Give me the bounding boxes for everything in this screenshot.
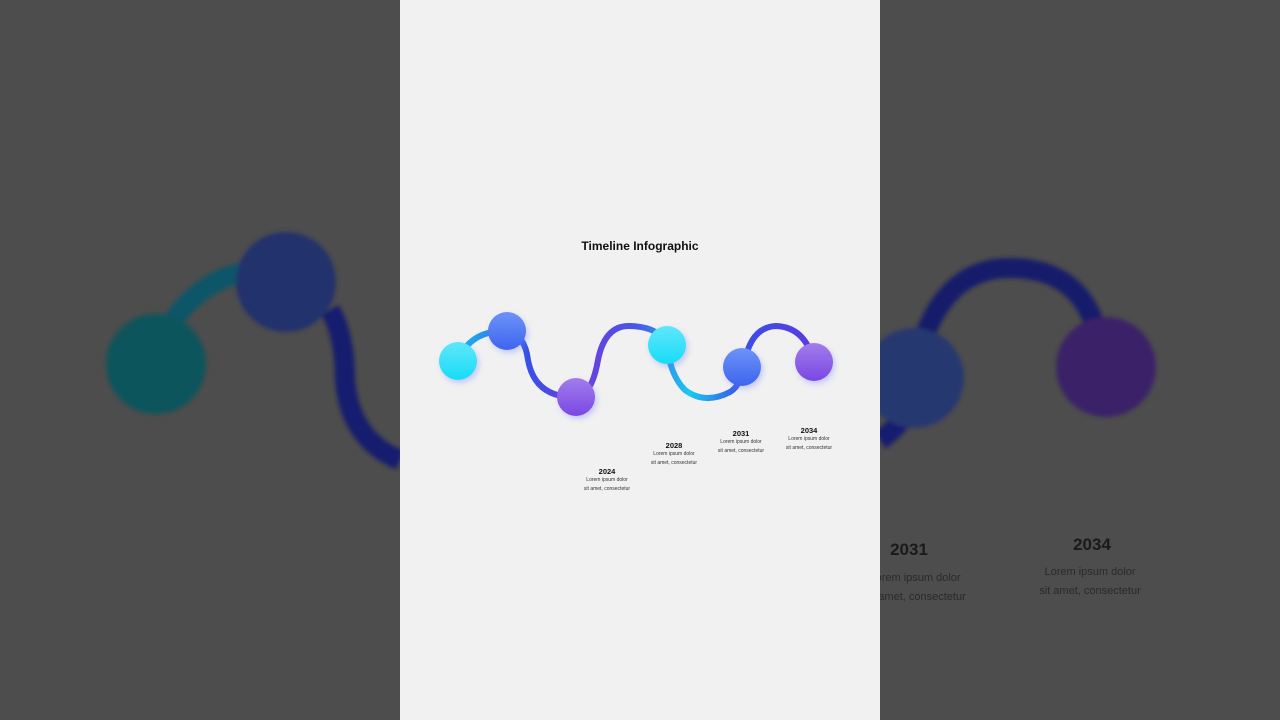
text: sit amet, consectetur	[1039, 585, 1141, 597]
label 2024: sit amet, consectetur	[584, 486, 630, 492]
text: 2034	[1073, 535, 1111, 554]
label 2024: Lorem ipsum dolor	[586, 477, 628, 483]
label 2031	[718, 429, 764, 454]
right blurred labels: 2031	[890, 540, 928, 559]
label 2034	[786, 426, 832, 451]
chart: wave timeline	[438, 312, 838, 422]
label 2028: 2028	[666, 441, 682, 450]
node 6	[795, 343, 833, 381]
label 2024	[584, 467, 630, 492]
title: Timeline Infographic	[581, 239, 699, 253]
text: Lorem ipsum dolor	[869, 572, 961, 584]
node 5	[723, 348, 761, 386]
label 2034: sit amet, consectetur	[786, 445, 832, 451]
node 2	[488, 312, 526, 350]
label 2034: 2034	[801, 426, 817, 435]
label 2028: sit amet, consectetur	[651, 460, 697, 466]
left blurred scene	[106, 232, 400, 460]
text: sit amet, consectetur	[864, 591, 966, 603]
label 2031: 2031	[733, 429, 749, 438]
label 2028: Lorem ipsum dolor	[653, 451, 695, 457]
label 2031: sit amet, consectetur	[718, 448, 764, 454]
right blurred scene	[864, 268, 1156, 440]
text: Lorem ipsum dolor	[1044, 566, 1136, 578]
label 2034: Lorem ipsum dolor	[788, 436, 830, 442]
node 4	[648, 326, 686, 364]
node 3	[557, 378, 595, 416]
label 2031: Lorem ipsum dolor	[720, 439, 762, 445]
panel: main infographic	[400, 0, 880, 720]
label 2024: 2024	[599, 467, 615, 476]
label 2028	[651, 441, 697, 466]
node 1	[439, 342, 477, 380]
